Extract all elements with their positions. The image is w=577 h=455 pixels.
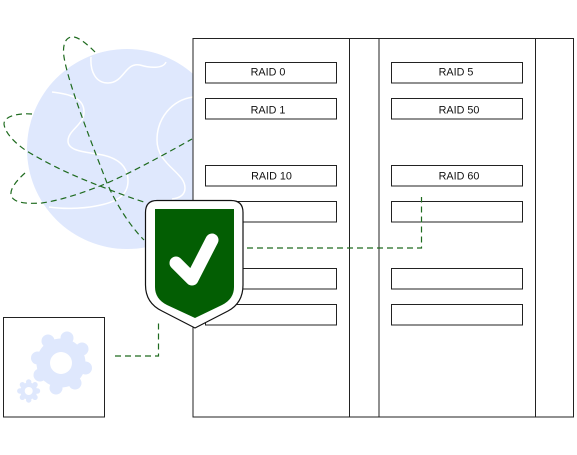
empty slot 5 (206, 268, 336, 289)
RAID 1 slot: RAID 1 (251, 104, 285, 116)
RAID 60 slot (392, 166, 522, 186)
RAID 5 slot: RAID 5 (439, 66, 473, 78)
icon: large gear (31, 332, 92, 394)
RAID 1 slot (206, 98, 336, 119)
dashed connector: shield to RAID column (247, 197, 422, 248)
empty slot 4 (392, 202, 522, 222)
orbit paths (4, 37, 192, 240)
icon: small gear (17, 379, 40, 403)
empty slot 5 (392, 268, 522, 289)
right RAID column (392, 62, 522, 325)
RAID 0 slot (206, 62, 336, 83)
icon: security shield with check (146, 200, 243, 328)
RAID 10 slot: RAID 10 (251, 170, 292, 182)
RAID 50 slot (392, 98, 522, 119)
settings panel (4, 318, 104, 417)
RAID 5 slot (392, 62, 522, 83)
empty slot 4 (206, 202, 336, 222)
left RAID column (206, 62, 336, 325)
empty slot 6 (392, 304, 522, 325)
dashed connector: settings to shield (115, 321, 158, 356)
server rack frame (193, 38, 574, 417)
RAID 0 slot: RAID 0 (251, 66, 285, 78)
RAID 50 slot: RAID 50 (439, 104, 479, 116)
globe (27, 49, 227, 249)
RAID 60 slot: RAID 60 (439, 170, 479, 182)
empty slot 6 (206, 304, 336, 325)
RAID 10 slot (206, 166, 336, 186)
